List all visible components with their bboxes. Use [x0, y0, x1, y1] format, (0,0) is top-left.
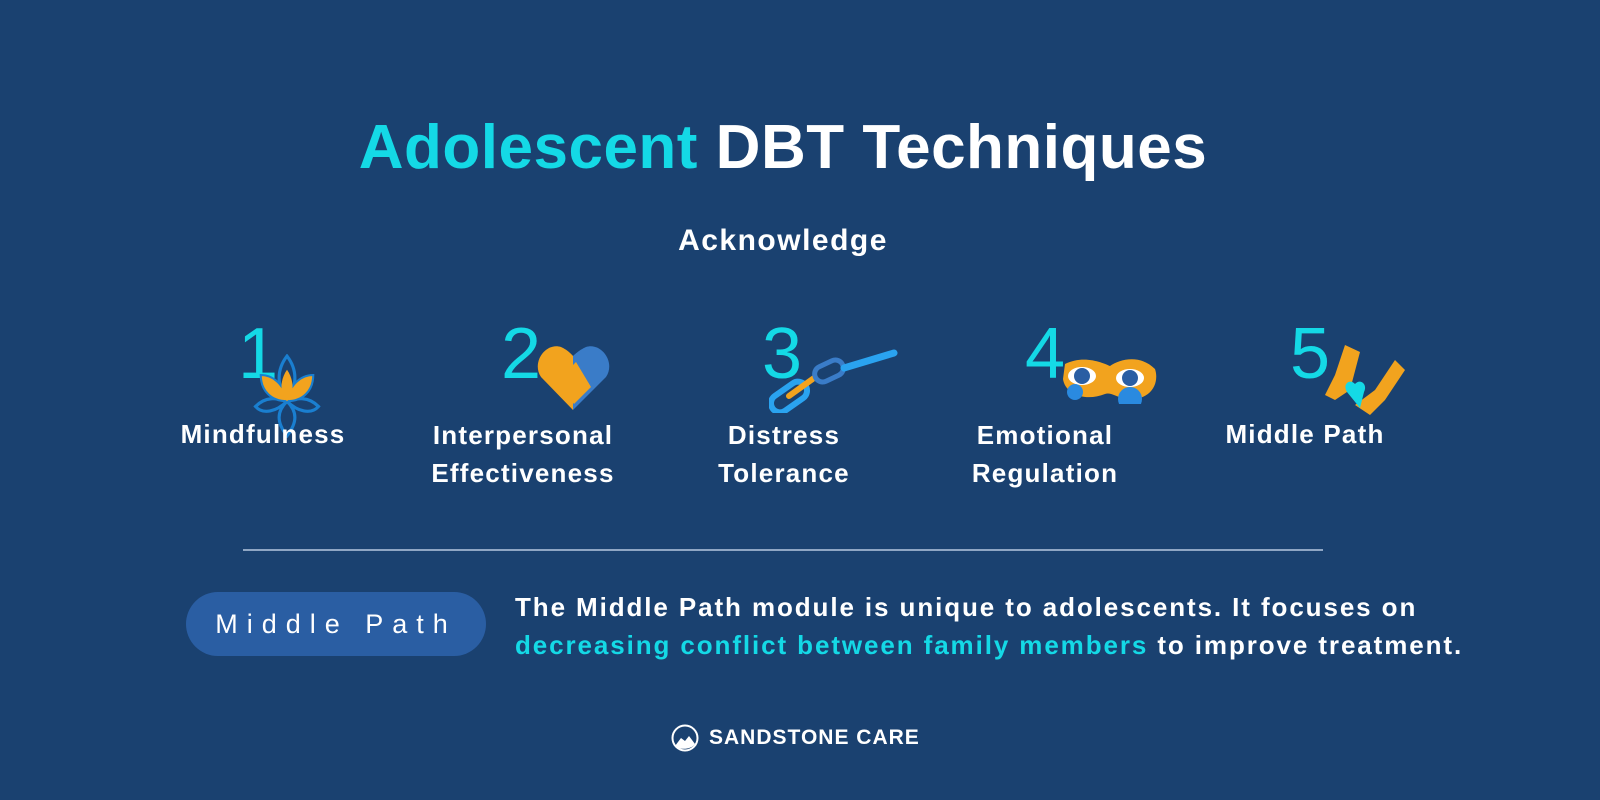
label: Regulation: [972, 458, 1118, 488]
item 1: mindfulness: [181, 314, 345, 449]
label: [431, 420, 615, 488]
pill: Middle Path: Middle Path: [215, 609, 457, 639]
subtitle: Acknowledge: [678, 224, 888, 257]
label: Middle Path: [1225, 419, 1385, 449]
pill: Middle Path: [186, 592, 486, 656]
logo: SANDSTONE CARE: [709, 726, 920, 749]
label: Effectiveness: [431, 458, 615, 488]
icon: lotus: [253, 354, 320, 438]
description text: [515, 592, 1463, 660]
label: [718, 420, 850, 488]
item 2: interpersonal: [431, 314, 615, 488]
icon: hands with heart: [1325, 345, 1405, 415]
label: Distress: [728, 420, 840, 450]
item 3: distress: 3: [762, 314, 802, 394]
label: Interpersonal: [433, 420, 613, 450]
item 1: mindfulness: 1: [238, 314, 278, 394]
item 3: distress: [718, 314, 898, 488]
icon: broken chain: [769, 350, 898, 413]
item 2: interpersonal: 2: [501, 314, 541, 394]
title: Adolescent DBT Techniques: [359, 113, 1207, 182]
description text: decreasing conflict between family members to improve treatment.: [515, 630, 1463, 660]
item 5: middle path: 5: [1290, 314, 1330, 394]
label: Tolerance: [718, 458, 850, 488]
item 5: middle path: [1225, 314, 1405, 449]
description text: The Middle Path module is unique to adolescents. It focuses on: [515, 592, 1417, 622]
label: Mindfulness: [181, 419, 345, 449]
icon: logo circle: [672, 724, 698, 752]
item 4: emotional: 4: [1025, 314, 1065, 394]
label: Emotional: [977, 420, 1113, 450]
item 4: emotional: [972, 314, 1156, 488]
label: [972, 420, 1118, 488]
icon: handshake heart: [538, 346, 610, 410]
icon: eyes mask: [1063, 359, 1156, 404]
